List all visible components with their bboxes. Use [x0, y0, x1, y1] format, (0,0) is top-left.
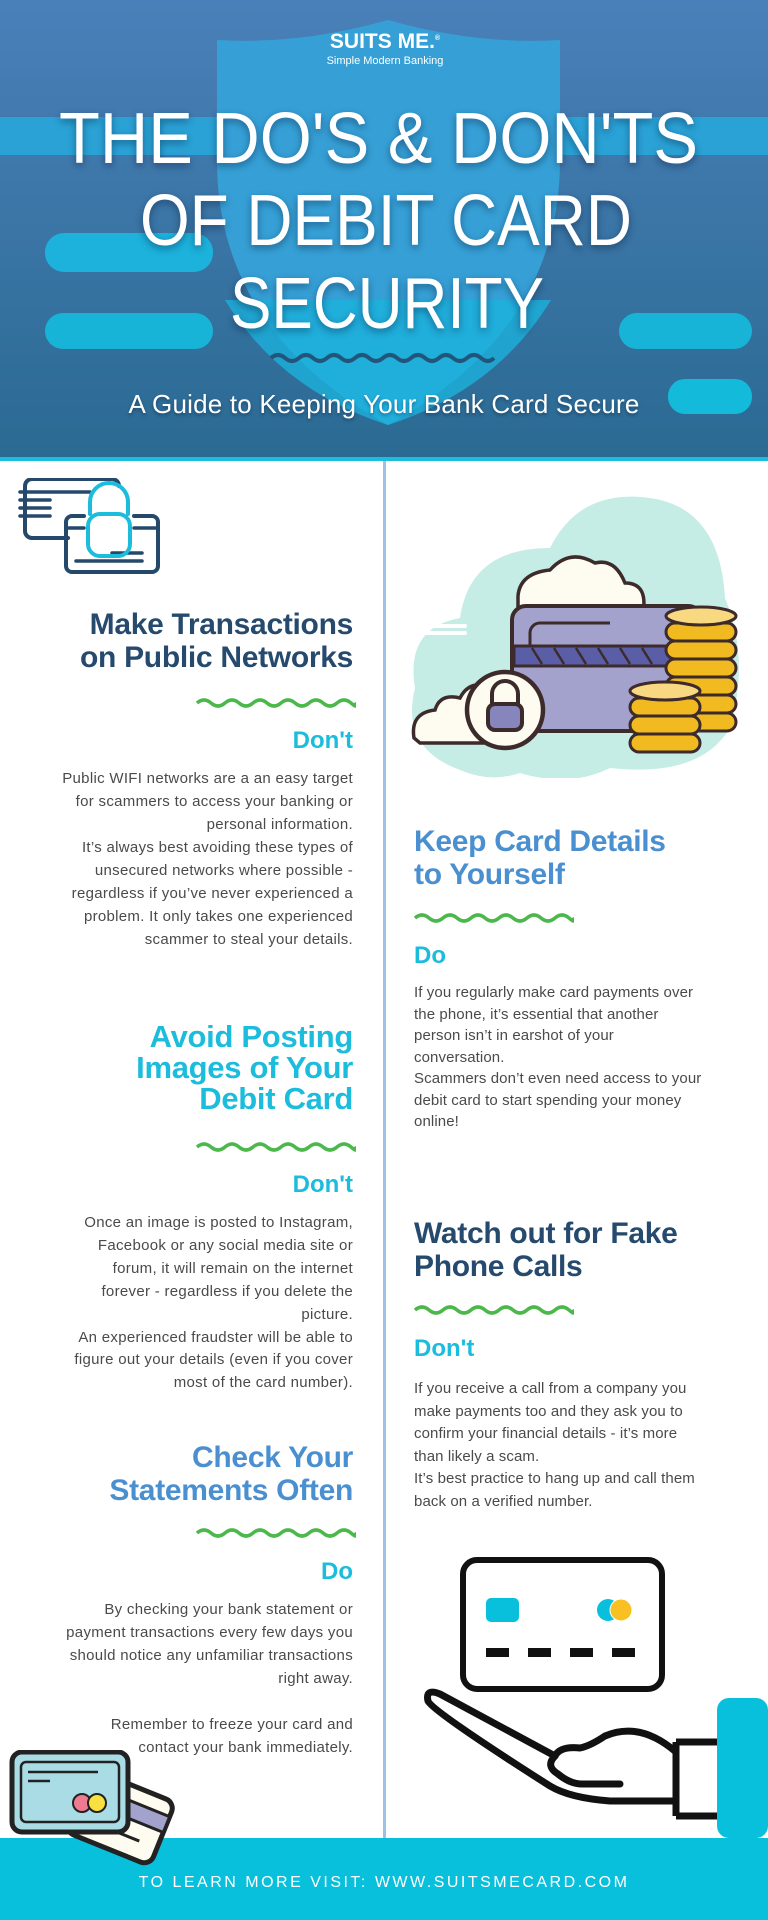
wave 2: [196, 1142, 356, 1152]
label: Do 4: Do: [414, 942, 446, 969]
title: [57, 99, 700, 344]
heading: Make Transactions on Public Networks: Make Transactions: [90, 608, 353, 641]
heading: Avoid Posting Images: Debit Card: [199, 1081, 353, 1116]
text: public networks: personal information.: [207, 816, 353, 833]
text: posting images: Facebook or any social media site or: [98, 1237, 353, 1254]
text: public networks: It’s always best avoiding these types of: [82, 839, 353, 856]
text: public networks: for scammers to access your banking or: [76, 793, 353, 810]
heading: Check Your Statements Often: [109, 1441, 353, 1507]
logo: [327, 30, 443, 67]
heading: Make Transactions on Public Networks: on Public Networks: [80, 641, 353, 674]
footer: TO LEARN MORE VISIT: WWW.SUITSMECARD.COM: [139, 1874, 629, 1891]
title: OF DEBIT CARD: [140, 181, 632, 261]
text: public networks: scammer to steal your details.: [145, 931, 353, 948]
text: statements: payment transactions every few days you: [66, 1624, 353, 1641]
text: fake calls: If you receive a call from a company you: [414, 1380, 686, 1397]
heading: Check Your Statements Often: Statements Often: [109, 1474, 353, 1507]
logo: Simple Modern Banking: [327, 55, 443, 67]
heading: Avoid Posting Images: Images of Your: [136, 1050, 353, 1085]
label: Don't 2: Don't: [293, 1171, 353, 1198]
text: statements: [66, 1601, 353, 1756]
pills: [45, 233, 213, 272]
band: [0, 117, 768, 155]
text: posting images: picture.: [301, 1306, 353, 1323]
text: public networks: problem. It only takes one experienced: [84, 908, 353, 925]
text: card details: Scammers don’t even need access to your: [414, 1070, 701, 1087]
text: card details: If you regularly make card payments over: [414, 984, 693, 1001]
text: posting images: most of the card number).: [174, 1374, 353, 1391]
text: public networks: unsecured networks where possible -: [95, 862, 353, 879]
text: statements: contact your bank immediately.: [138, 1739, 353, 1756]
text: public networks: Public WIFI networks are a an easy target: [62, 770, 353, 787]
label: Do 3: Do: [321, 1558, 353, 1585]
text: statements: By checking your bank statement or: [104, 1601, 353, 1618]
text: fake calls: back on a verified number.: [414, 1493, 593, 1510]
text: card details: online!: [414, 1113, 459, 1130]
heading: Make Transactions on Public Networks: [80, 608, 353, 674]
text: statements: should notice any unfamiliar transactions: [70, 1647, 353, 1664]
icon: cards with lock: [18, 478, 160, 574]
heading: Keep Card Details to Yourself: to Yourself: [414, 858, 565, 891]
text: fake calls: confirm your financial details - it’s more: [414, 1425, 677, 1442]
text: posting images: forum, it will remain on the internet: [113, 1260, 353, 1277]
text: statements: right away.: [278, 1670, 353, 1687]
text: public networks: regardless if you’ve never experienced a: [72, 885, 353, 902]
label: Don't 5: Don't: [414, 1335, 474, 1362]
heading: Keep Card Details to Yourself: Keep Card Details: [414, 825, 666, 858]
wave 3: [196, 1528, 356, 1538]
shield: [217, 20, 560, 425]
text: posting images: [74, 1214, 353, 1391]
text: fake calls: than likely a scam.: [414, 1448, 539, 1465]
heading: Keep Card Details to Yourself: [414, 825, 666, 891]
illustration: card with coins in cloud: [412, 496, 739, 778]
illustration: bottom-left cards: [10, 1750, 175, 1866]
heading: Watch out for Fake Phone Calls: Phone Calls: [414, 1250, 582, 1283]
text: statements: Remember to freeze your card and: [111, 1716, 353, 1733]
logo: SUITS ME.®: [330, 30, 440, 53]
text: posting images: An experienced fraudster will be able to: [78, 1329, 353, 1346]
text: card details: conversation.: [414, 1048, 505, 1066]
heading: Check Your Statements Often: Check Your: [192, 1441, 353, 1474]
text: fake calls: make payments too and they ask you to: [414, 1403, 683, 1420]
label: Don't 1: Don't: [293, 727, 353, 754]
text: card details: the phone, it’s essential that another: [414, 1006, 659, 1022]
heading: Avoid Posting Images: [136, 1019, 353, 1116]
wave under title: [271, 355, 494, 361]
wave 4: [414, 913, 574, 923]
wave 1: [196, 698, 356, 708]
text: card details: [414, 984, 701, 1130]
heading: Avoid Posting Images: Avoid Posting: [150, 1019, 353, 1054]
text: posting images: forever - regardless if you delete the: [101, 1283, 353, 1300]
text: posting images: figure out your details (even if you cover: [74, 1351, 353, 1368]
text: posting images: Once an image is posted to Instagram,: [84, 1214, 353, 1231]
text: public networks: [62, 770, 353, 948]
text: fake calls: [414, 1380, 695, 1510]
text: card details: debit card to start spending your money: [414, 1092, 681, 1108]
footer: [0, 1838, 768, 1920]
wave 5: [414, 1305, 574, 1315]
title: THE DO'S & DON'TS: [59, 99, 698, 179]
text: card details: person isn’t in earshot of your: [414, 1027, 614, 1044]
text: fake calls: It’s best practice to hang up and call them: [414, 1470, 695, 1487]
divider: [383, 461, 386, 1838]
heading: Watch out for Fake Phone Calls: Watch out for Fake: [414, 1217, 678, 1250]
heading: Watch out for Fake Phone Calls: [414, 1217, 678, 1283]
title: SECURITY: [230, 264, 544, 344]
header: [0, 0, 768, 461]
subtitle: A Guide to Keeping Your Bank Card Secure: [128, 389, 640, 419]
illustration: hand holding card: [424, 1557, 768, 1838]
